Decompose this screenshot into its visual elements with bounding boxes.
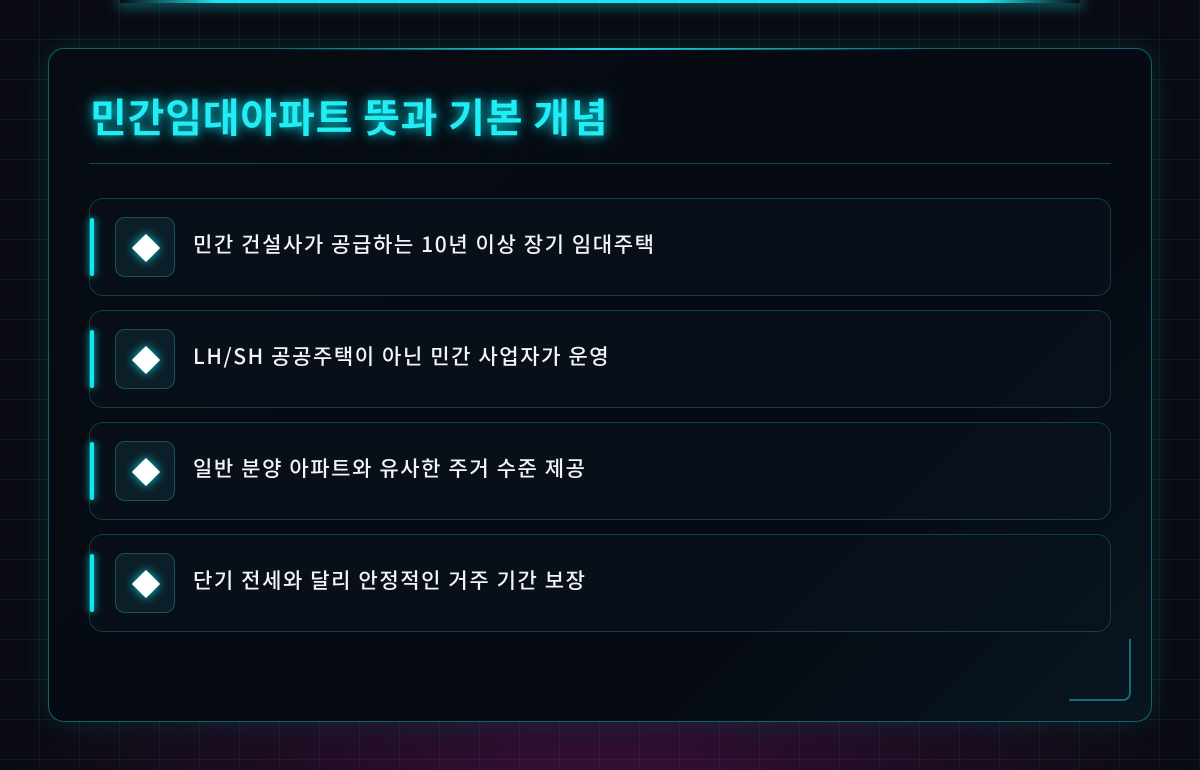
item 2 bbox=[89, 310, 1111, 408]
item 2: LH/SH 공공주택이 아닌 민간 사업자가 운영 bbox=[193, 341, 610, 371]
item 4 bbox=[89, 534, 1111, 632]
item 4: 단기 전세와 달리 안정적인 거주 기간 보장 bbox=[193, 565, 587, 595]
title: 민간임대아파트 뜻과 기본 개념 bbox=[90, 86, 608, 144]
corner bracket bbox=[1069, 639, 1131, 701]
item 1 bbox=[89, 198, 1111, 296]
item 1: 민간 건설사가 공급하는 10년 이상 장기 임대주택 bbox=[193, 229, 656, 259]
item 3: 일반 분양 아파트와 유사한 주거 수준 제공 bbox=[193, 453, 587, 483]
item 3 bbox=[89, 422, 1111, 520]
top glow bar bbox=[120, 0, 1080, 3]
